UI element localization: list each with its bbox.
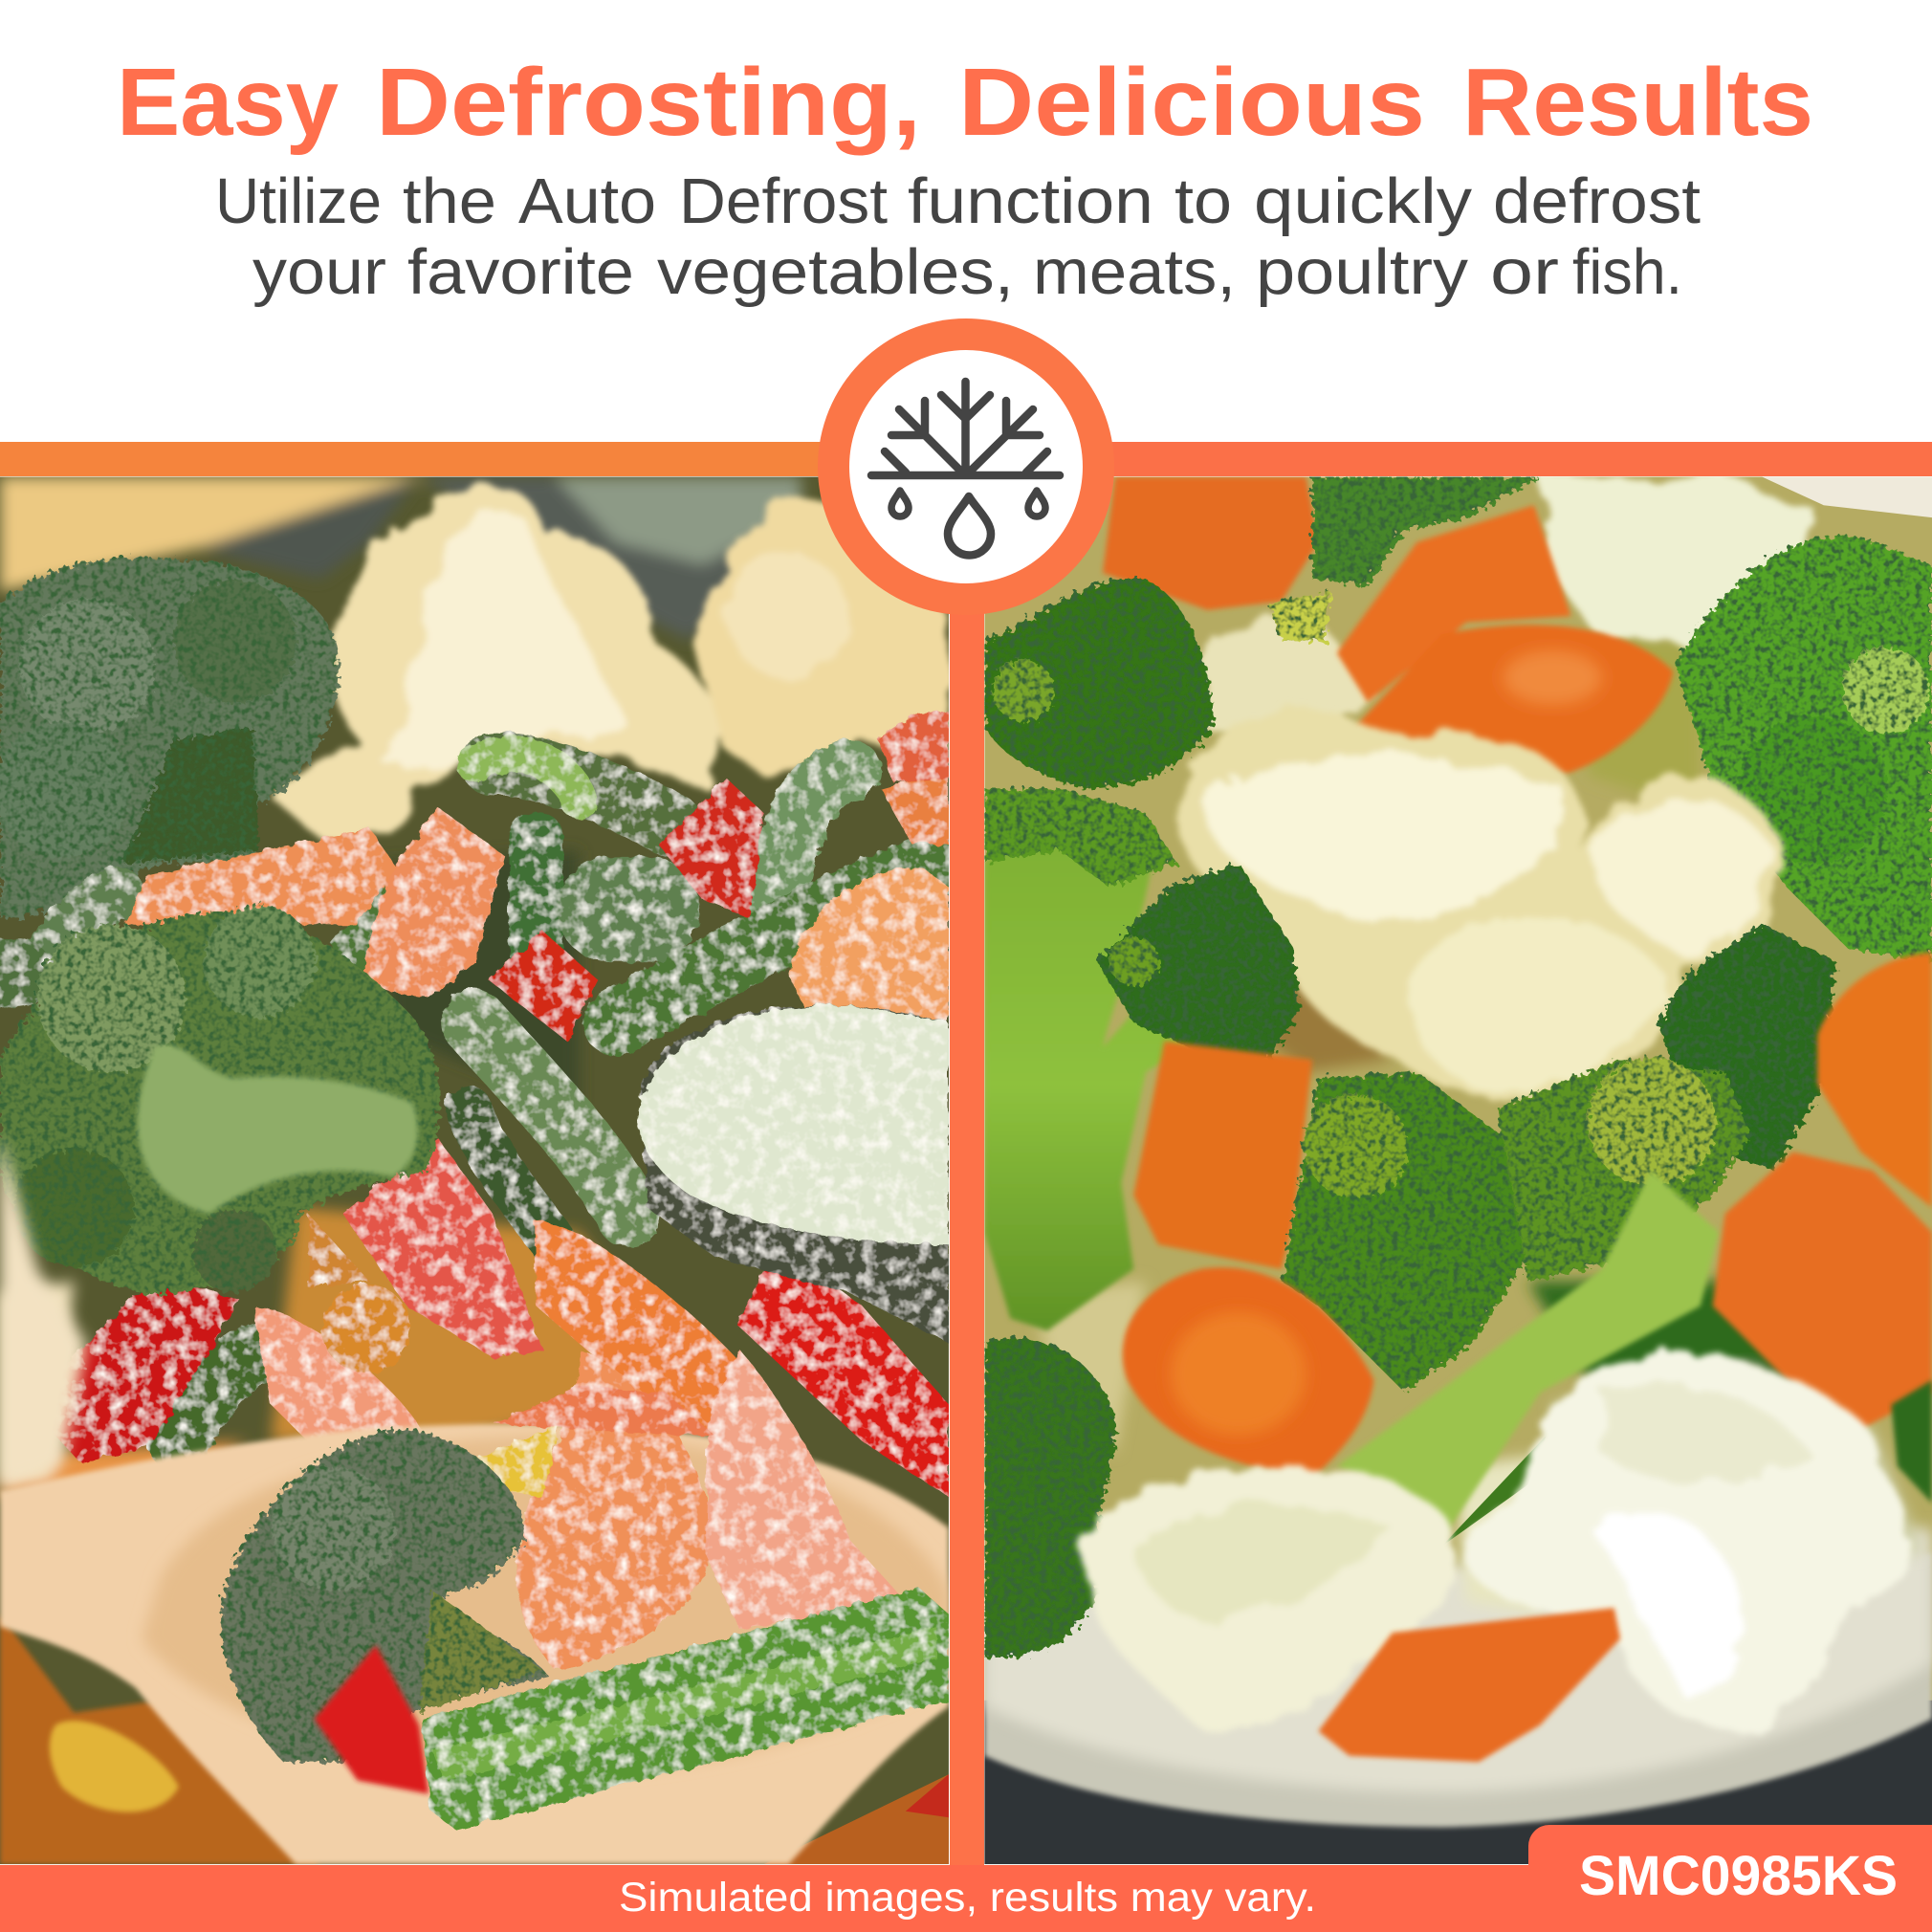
divider	[950, 476, 984, 1865]
subtitle: fish.	[1572, 236, 1682, 308]
broccoli: upper left	[984, 579, 1214, 788]
broccoli stem	[138, 1044, 418, 1214]
cauliflower: centre	[1176, 708, 1787, 1099]
subtitle: to	[1175, 165, 1232, 237]
title: Delicious	[958, 49, 1425, 156]
broccoli: top dark	[1269, 477, 1540, 641]
frozen carrots on spoon	[474, 1350, 906, 1670]
title: Defrosting,	[376, 49, 921, 156]
carrot: centre bottom	[1123, 1267, 1373, 1479]
frozen broccoli in spoon	[221, 1429, 548, 1762]
subtitle: your	[252, 236, 386, 308]
table	[0, 1614, 320, 1864]
broccoli stem: centre	[1337, 1171, 1719, 1540]
caption: Simulated images, results may vary.	[619, 1875, 1316, 1921]
subtitle: defrost	[1493, 165, 1701, 237]
corn kernel	[50, 1721, 179, 1812]
carrots: top	[1103, 477, 1673, 774]
cauliflower left edge	[0, 1133, 86, 1491]
plate	[984, 1552, 1932, 1827]
broccoli: right edge	[1891, 1380, 1932, 1504]
subtitle: vegetables,	[657, 236, 1014, 308]
footer bar	[0, 1865, 1932, 1932]
frozen broccoli: centre	[0, 906, 440, 1294]
wooden spoon	[0, 1424, 949, 1864]
shadow filler	[1035, 641, 1922, 1614]
frozen cauliflower	[274, 483, 949, 838]
carrots: right	[1713, 953, 1932, 1429]
subtitle: Defrost	[679, 165, 888, 237]
red pepper in spoon	[315, 1645, 428, 1794]
subtitle: function	[908, 165, 1153, 237]
model number: SMC0985KS	[1579, 1845, 1898, 1907]
frozen zucchini slice	[638, 1004, 949, 1343]
subtitle	[215, 165, 1701, 308]
photo: frozen vegetables	[0, 477, 949, 1864]
title: Easy	[117, 49, 339, 156]
bar: left top	[0, 442, 966, 476]
cauliflower: bottom left	[1083, 1466, 1460, 1728]
slate table	[984, 1701, 1932, 1864]
frozen corn bag	[0, 477, 801, 641]
title	[117, 49, 1813, 156]
subtitle: poultry	[1256, 236, 1469, 308]
broccoli: left floret and stem	[984, 839, 1269, 1330]
subtitle: Auto	[518, 165, 656, 237]
subtitle: or	[1490, 236, 1559, 308]
broccoli: centre florets	[1282, 1057, 1749, 1393]
subtitle: meats,	[1033, 236, 1236, 308]
title: Results	[1462, 49, 1813, 156]
frozen carrots	[123, 713, 949, 1441]
carrot: bottom	[1318, 1608, 1620, 1762]
subtitle: quickly	[1254, 165, 1473, 237]
SKU tab	[1528, 1825, 1932, 1932]
broccoli: dark right cluster	[1658, 924, 1836, 1171]
broccoli: far right	[1676, 536, 1932, 961]
photo: cooked vegetables	[984, 477, 1932, 1864]
bar: right top	[966, 442, 1932, 476]
cauliflower: top right	[1201, 477, 1824, 745]
subtitle: the	[403, 165, 496, 237]
subtitle: favorite	[407, 236, 634, 308]
cauliflower: bottom right	[1466, 1352, 1914, 1732]
frozen broccoli: top left	[0, 558, 339, 918]
broccoli: lower left	[984, 1338, 1116, 1658]
green bean in spoon	[422, 1587, 949, 1830]
carrot: centre left	[1133, 1042, 1312, 1269]
icon: defrost snowflake badge	[818, 318, 1114, 615]
frozen green beans and pieces	[0, 754, 943, 1441]
frozen red peppers	[27, 779, 949, 1497]
subtitle: Utilize	[215, 165, 382, 237]
warm underlay	[0, 847, 602, 1503]
